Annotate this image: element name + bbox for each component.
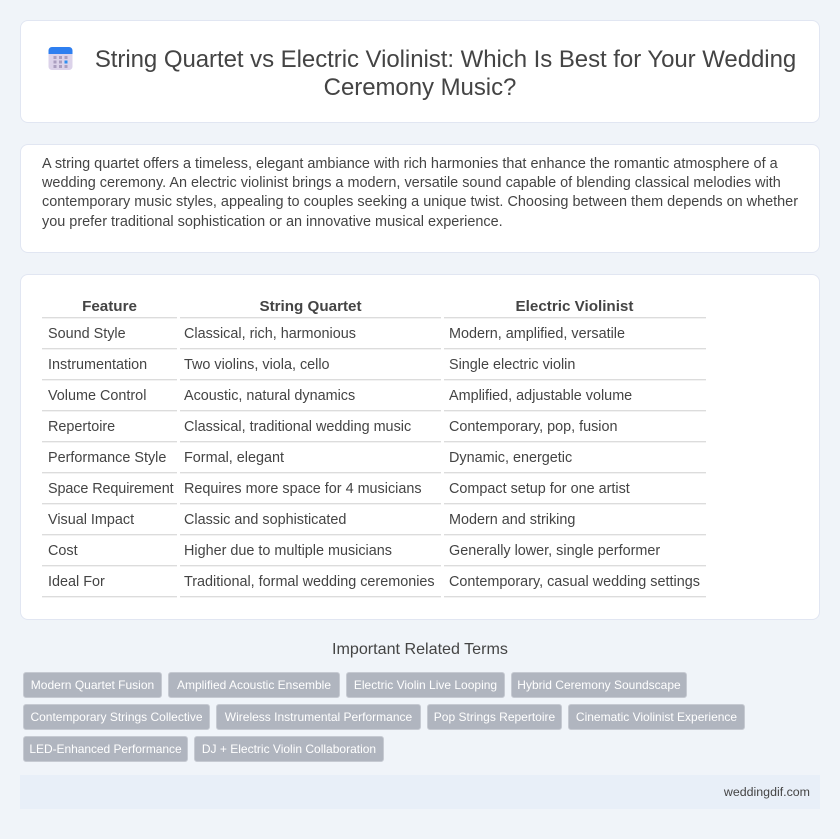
table header xyxy=(82,298,634,315)
row: Ideal For: Traditional, formal wedding ceremonies xyxy=(184,574,435,590)
heading: related terms: Important Related Terms xyxy=(332,640,508,658)
tag xyxy=(511,672,687,698)
tag: Modern Quartet Fusion xyxy=(31,678,154,692)
tag xyxy=(23,672,162,698)
row: Repertoire xyxy=(48,419,618,435)
intro line 2: wedding ceremony. An electric violinist brings a modern, versatile sound capable of blending classical melodies with xyxy=(42,175,781,191)
row: Visual Impact: Visual Impact xyxy=(48,512,134,528)
row: Cost: Generally lower, single performer xyxy=(449,543,660,559)
tag xyxy=(168,672,340,698)
row: Instrumentation: Single electric violin xyxy=(449,357,575,373)
row: Volume Control xyxy=(48,388,632,404)
row: Performance Style: Dynamic, energetic xyxy=(449,450,572,466)
row: Instrumentation: Two violins, viola, cello xyxy=(184,357,330,373)
tag: Hybrid Ceremony Soundscape xyxy=(517,678,681,692)
intro line 4: you prefer traditional sophistication or an innovative musical experience. xyxy=(42,214,503,230)
row: Repertoire: Classical, traditional wedding music xyxy=(184,419,411,435)
table header: String Quartet xyxy=(259,298,362,315)
tag: Wireless Instrumental Performance xyxy=(225,710,412,724)
tag: LED-Enhanced Performance xyxy=(29,742,182,756)
row: Visual Impact: Classic and sophisticated xyxy=(184,512,346,528)
intro line 3: contemporary music styles, appealing to couples seeking a unique twist. Choosing between them depends on whether xyxy=(42,194,798,210)
table header: Electric Violinist xyxy=(516,298,633,315)
row: Ideal For: Contemporary, casual wedding settings xyxy=(449,574,700,590)
row: Sound Style: Modern, amplified, versatile xyxy=(449,326,625,342)
row: Volume Control: Amplified, adjustable volume xyxy=(449,388,632,404)
row: Space Requirement: Space Requirement xyxy=(48,481,174,497)
tag xyxy=(346,672,505,698)
tag: Amplified Acoustic Ensemble xyxy=(177,678,331,692)
tag xyxy=(568,704,745,730)
comparison table content xyxy=(42,298,706,598)
row: Cost xyxy=(48,543,660,559)
row: Performance Style: Performance Style xyxy=(48,450,166,466)
tag xyxy=(216,704,421,730)
tag: Pop Strings Repertoire xyxy=(434,710,555,724)
footer bar xyxy=(20,775,820,809)
row: Space Requirement: Requires more space for 4 musicians xyxy=(184,481,422,497)
title line 2: Ceremony Music? xyxy=(324,74,516,101)
row: Instrumentation: Instrumentation xyxy=(48,357,147,373)
row: Ideal For: Ideal For xyxy=(48,574,105,590)
panel: comparison table xyxy=(20,274,820,620)
tag xyxy=(194,736,384,762)
row: Volume Control: Volume Control xyxy=(48,388,146,404)
intro line 1: A string quartet offers a timeless, elegant ambiance with rich harmonies that enhance the romantic atmosphere of a xyxy=(42,156,778,172)
panel: intro text xyxy=(20,144,820,253)
row: Instrumentation xyxy=(48,357,575,373)
tag xyxy=(23,704,210,730)
row: Space Requirement: Compact setup for one artist xyxy=(449,481,630,497)
row: Volume Control: Acoustic, natural dynamics xyxy=(184,388,355,404)
row: Cost: Cost xyxy=(48,543,78,559)
panel: title card xyxy=(20,20,820,123)
related term tags xyxy=(23,672,745,762)
footer source: weddingdif.com xyxy=(724,785,810,799)
row: Repertoire: Contemporary, pop, fusion xyxy=(449,419,618,435)
row: Visual Impact xyxy=(48,512,575,528)
row: Ideal For xyxy=(48,574,700,590)
tag: Electric Violin Live Looping xyxy=(354,678,497,692)
row: Repertoire: Repertoire xyxy=(48,419,115,435)
row: Performance Style: Formal, elegant xyxy=(184,450,284,466)
row: Sound Style xyxy=(48,326,625,342)
tag: DJ + Electric Violin Collaboration xyxy=(202,742,376,756)
tag xyxy=(427,704,562,730)
row: Space Requirement xyxy=(48,481,630,497)
row: Sound Style: Sound Style xyxy=(48,326,126,342)
row: Cost: Higher due to multiple musicians xyxy=(184,543,392,559)
row: Performance Style xyxy=(48,450,572,466)
row: Visual Impact: Modern and striking xyxy=(449,512,575,528)
tag xyxy=(23,736,188,762)
tag: Contemporary Strings Collective xyxy=(30,710,203,724)
title line 1: String Quartet vs Electric Violinist: Which Is Best for Your Wedding xyxy=(95,46,796,73)
tag: Cinematic Violinist Experience xyxy=(576,710,737,724)
icon: calendar xyxy=(48,47,72,70)
row: Sound Style: Classical, rich, harmonious xyxy=(184,326,356,342)
table header: Feature xyxy=(82,298,137,315)
